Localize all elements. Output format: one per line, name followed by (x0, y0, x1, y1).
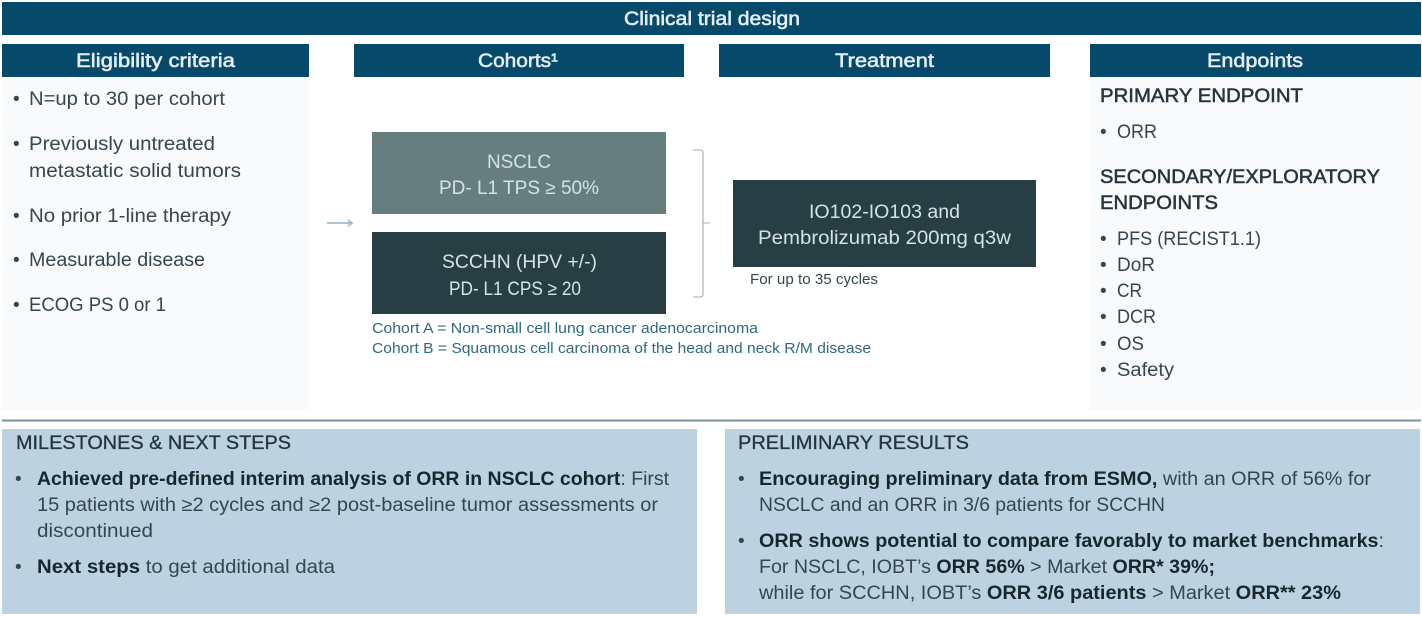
milestones list: • (15, 469, 22, 490)
criteria list: No prior 1-line therapy (29, 206, 232, 227)
results list: • (738, 531, 745, 552)
title banner (2, 2, 1421, 35)
cohort box: SCCHN: PD- L1 CPS ≥ 20 (449, 279, 581, 300)
criteria list: N=up to 30 per cohort (29, 89, 226, 110)
heading: eligibility criteria: Eligibility criteria (76, 50, 235, 72)
cohort footnotes (372, 321, 871, 357)
cohort footnotes: Cohort B = Squamous cell carcinoma of the head and neck R/M disease (372, 341, 871, 357)
primary endpoint: PRIMARY ENDPOINT (1100, 86, 1303, 107)
secondary and exploratory endpoints: CR (1117, 281, 1142, 302)
criteria list: Previously untreated (29, 134, 215, 155)
results list: • (738, 469, 745, 490)
milestones list: 15 patients with ≥2 cycles and ≥2 post-baseline tumor assessments or (37, 495, 659, 516)
secondary and exploratory endpoints: Safety (1117, 360, 1175, 381)
cohort box: SCCHN (372, 232, 666, 314)
heading: cohorts: Cohorts¹ (478, 50, 559, 72)
milestones list: • (15, 557, 22, 578)
secondary and exploratory endpoints: • (1100, 281, 1107, 302)
results list (738, 469, 1384, 604)
criteria list: metastatic solid tumors (29, 161, 241, 182)
secondary and exploratory endpoints (1100, 167, 1380, 381)
arrow: eligibility to cohorts (327, 220, 352, 226)
heading: milestones: MILESTONES & NEXT STEPS (16, 433, 291, 454)
panel: milestones and next steps (2, 429, 697, 614)
criteria list (13, 89, 241, 316)
results list: ORR shows potential to compare favorably to market benchmarks : (759, 531, 1384, 552)
cohort box: NSCLC (372, 132, 666, 214)
results list: Encouraging preliminary data from ESMO, with an ORR of 56% for (759, 469, 1372, 490)
bracket joining cohorts to treatment (693, 150, 710, 297)
milestones list: Next steps to get additional data (37, 557, 335, 578)
panel: preliminary results (725, 429, 1420, 614)
criteria list: • (13, 250, 20, 271)
heading: preliminary results: PRELIMINARY RESULTS (738, 433, 969, 454)
secondary and exploratory endpoints: • (1100, 307, 1107, 328)
primary endpoint (1100, 86, 1303, 143)
criteria list: Measurable disease (29, 250, 205, 271)
criteria list: • (13, 134, 20, 155)
secondary and exploratory endpoints: PFS (RECIST1.1) (1117, 229, 1261, 250)
heading: treatment: Treatment (835, 50, 935, 72)
criteria list: • (13, 295, 20, 316)
treatment box: IO102-IO103 and (809, 202, 960, 223)
secondary and exploratory endpoints: ENDPOINTS (1100, 193, 1218, 214)
milestones list: discontinued (37, 521, 153, 542)
results list: NSCLC and an ORR in 3/6 patients for SCCHN (759, 495, 1165, 516)
secondary and exploratory endpoints: OS (1117, 334, 1144, 355)
treatment duration note: For up to 35 cycles (750, 271, 878, 288)
cohort box: SCCHN: SCCHN (HPV +/-) (442, 252, 597, 273)
milestones list (15, 469, 670, 578)
results list: while for SCCHN, IOBT’s ORR 3/6 patients > Market ORR** 23% (758, 583, 1341, 604)
criteria list: • (13, 206, 20, 227)
secondary and exploratory endpoints: • (1100, 334, 1107, 355)
heading: endpoints: Endpoints (1207, 50, 1303, 72)
milestones list: Achieved pre-defined interim analysis of ORR in NSCLC cohort : First (37, 469, 670, 490)
primary endpoint: • (1100, 122, 1107, 143)
heading: endpoints (1090, 44, 1421, 77)
treatment box: Pembrolizumab 200mg q3w (758, 228, 1011, 249)
heading: eligibility criteria (2, 44, 309, 77)
panel: endpoints (1090, 44, 1421, 410)
secondary and exploratory endpoints: • (1100, 229, 1107, 250)
secondary and exploratory endpoints: DCR (1117, 307, 1156, 328)
cohort footnotes: Cohort A = Non-small cell lung cancer adenocarcinoma (372, 321, 759, 337)
heading: cohorts (354, 44, 684, 77)
results list: For NSCLC, IOBT’s ORR 56% > Market ORR* 39%; (759, 557, 1215, 578)
secondary and exploratory endpoints: DoR (1117, 255, 1155, 276)
secondary and exploratory endpoints: • (1100, 360, 1107, 381)
secondary and exploratory endpoints: • (1100, 255, 1107, 276)
primary endpoint: ORR (1117, 122, 1157, 143)
heading: treatment (719, 44, 1050, 77)
treatment box (733, 180, 1036, 267)
criteria list: • (13, 89, 20, 110)
cohort box: NSCLC: PD- L1 TPS ≥ 50% (439, 178, 599, 199)
cohort box: NSCLC: NSCLC (487, 152, 551, 173)
criteria list: ECOG PS 0 or 1 (29, 295, 166, 316)
panel: eligibility criteria (2, 44, 309, 410)
title banner: Clinical trial design (624, 8, 800, 30)
secondary and exploratory endpoints: SECONDARY/EXPLORATORY (1100, 167, 1380, 188)
